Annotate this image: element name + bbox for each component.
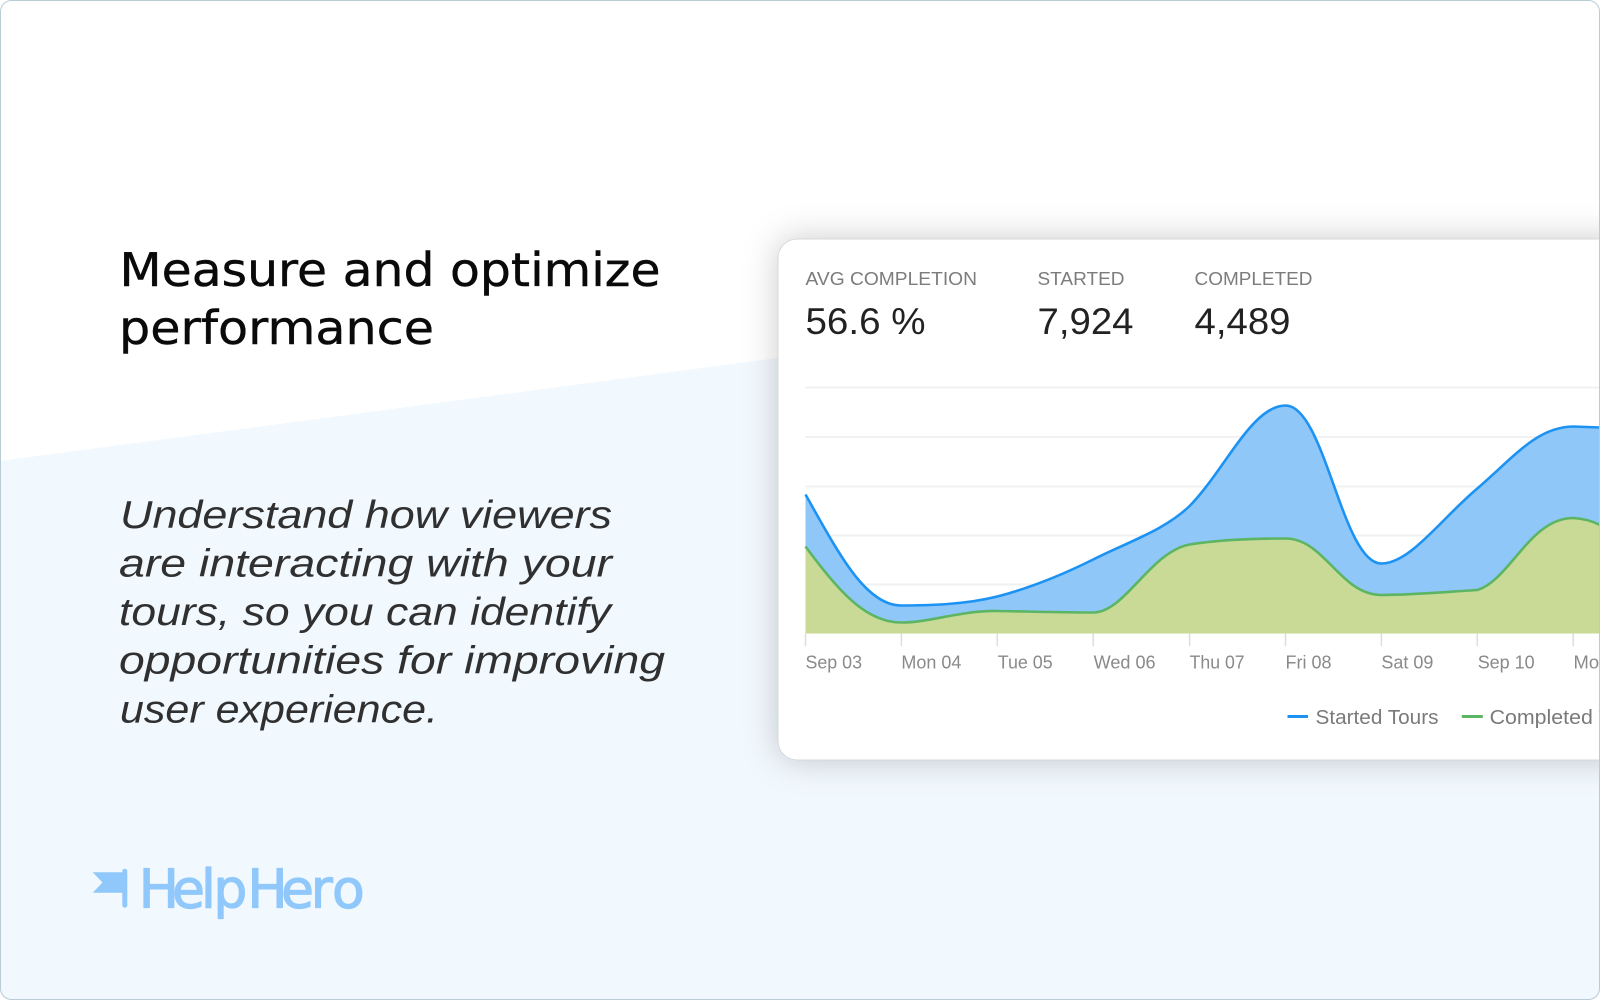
legend: [1288, 709, 1599, 728]
x axis labels: Sep 03: [806, 652, 862, 672]
title: [119, 243, 660, 355]
description text: Understand how viewers: [120, 494, 612, 537]
title: performance: [119, 301, 434, 355]
line: completed tours: [806, 518, 1600, 622]
background: pale blue diagonal panel: [1, 358, 1599, 999]
stat: completed: 4,489: [1194, 301, 1290, 342]
line: started tours: [806, 406, 1600, 606]
legend: started tours: [1288, 709, 1438, 724]
x axis labels: Mon 04: [901, 652, 961, 672]
stat: completed: [1194, 269, 1312, 342]
stat: avg completion: 56.6 %: [806, 301, 926, 342]
stat: avg completion: AVG COMPLETION: [806, 269, 977, 289]
description text: user experience.: [120, 688, 438, 732]
description text: [119, 494, 665, 732]
icon: flag: [93, 869, 127, 908]
x axis labels: Sat 09: [1381, 652, 1433, 672]
description text: are interacting with your: [119, 542, 614, 586]
area: started tours: [806, 406, 1600, 634]
logo: HelpHero: [92, 866, 362, 920]
stats row: [806, 269, 1312, 342]
x axis labels: Wed 06: [1094, 652, 1156, 672]
description text: tours, so you can identify: [119, 591, 614, 634]
logo wordmark: HelpHero: [139, 858, 365, 921]
x axis labels: [806, 655, 1598, 672]
stat: completed: COMPLETED: [1194, 269, 1312, 289]
stat: started: [1038, 269, 1134, 342]
x axis labels: Thu 07: [1190, 652, 1245, 672]
stat: started: 7,924: [1038, 301, 1134, 342]
stat: started: STARTED: [1038, 269, 1124, 289]
x axis labels: Fri 08: [1286, 652, 1332, 672]
panel: dashboard card: [778, 239, 1600, 760]
area: completed tours: [806, 518, 1600, 634]
stat: avg completion: [806, 272, 976, 334]
area chart: [806, 388, 1600, 646]
x axis labels: Sep 10: [1478, 652, 1535, 672]
x axis labels: Tue 05: [998, 652, 1053, 672]
card background: [778, 239, 1600, 760]
title: Measure and optimize: [120, 243, 660, 297]
description text: opportunities for improving: [119, 640, 665, 682]
legend: started tours: Started Tours: [1316, 707, 1438, 729]
